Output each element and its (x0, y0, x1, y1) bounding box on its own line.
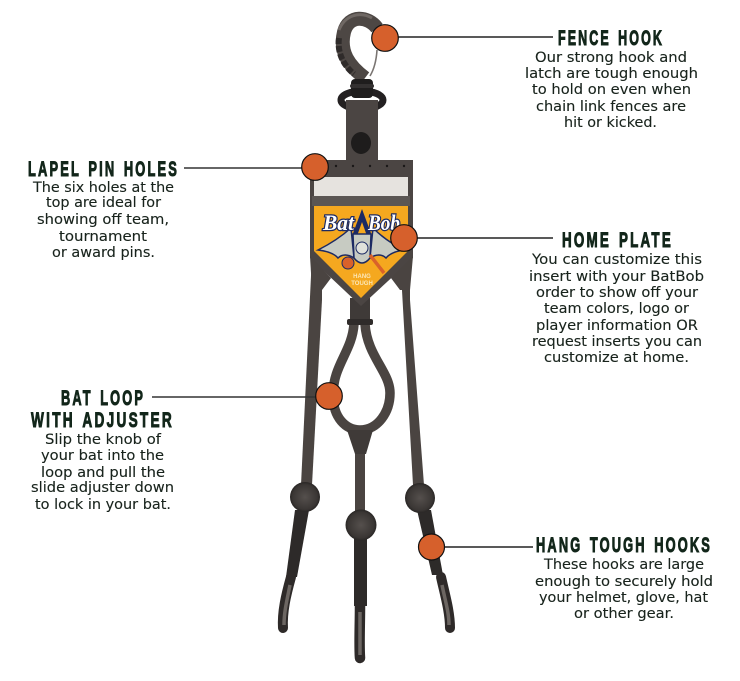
description: top are ideal for (46, 195, 161, 211)
description: slide adjuster down (31, 480, 174, 496)
heading: LAPEL PIN HOLES (28, 158, 179, 181)
description: enough to securely hold (535, 574, 713, 590)
description: customize at home. (544, 350, 689, 366)
three straps (286, 255, 443, 606)
description: tournament (59, 229, 148, 245)
description: latch are tough enough (525, 66, 698, 82)
description: or other gear. (574, 606, 674, 622)
description: player information OR (536, 318, 698, 334)
logo text: Bob (367, 210, 400, 235)
insert caption: TOUGH (351, 281, 373, 287)
description (32, 180, 174, 261)
description: loop and pull the (41, 465, 165, 481)
insert caption: HANG (353, 274, 371, 280)
description (529, 252, 704, 366)
marker (152, 383, 342, 409)
bat loop with adjuster (333, 298, 390, 454)
marker (184, 154, 328, 180)
medallions and hooks (283, 482, 450, 658)
top plate with lapel pin holes (310, 100, 413, 306)
callout: hang tough hooks (418, 534, 713, 622)
description: Slip the knob of (45, 432, 162, 448)
description: chain link fences are (536, 99, 686, 115)
description: to hold on even when (532, 82, 691, 98)
heading: FENCE HOOK (558, 27, 664, 50)
marker (418, 534, 533, 560)
marker (372, 25, 553, 51)
description: request inserts you can (532, 334, 702, 350)
description: team colors, logo or (544, 301, 689, 317)
description: You can customize this (531, 252, 702, 268)
heading: WITH ADJUSTER (31, 409, 174, 432)
callout: bat loop with adjuster (31, 383, 342, 513)
description: The six holes at the (32, 180, 174, 196)
description (525, 50, 698, 131)
callout: fence hook (372, 25, 698, 131)
insert caption (351, 274, 373, 287)
logo text (322, 210, 400, 235)
home plate insert (314, 206, 408, 298)
description (31, 432, 174, 513)
fence hook (339, 15, 383, 109)
description: order to show off your (536, 285, 698, 301)
heading: HOME PLATE (562, 229, 673, 252)
description: to lock in your bat. (35, 497, 171, 513)
description: your bat into the (41, 448, 164, 464)
logo text: Bat (322, 210, 355, 235)
description: These hooks are large (543, 557, 704, 573)
heading (31, 387, 174, 432)
product: BatBob organizer (283, 15, 450, 658)
marker (391, 225, 553, 251)
description: insert with your BatBob (529, 269, 704, 285)
description: hit or kicked. (564, 115, 657, 131)
description: or award pins. (52, 245, 155, 261)
description: your helmet, glove, hat (539, 590, 709, 606)
bat mascot (318, 209, 404, 273)
description: showing off team, (37, 212, 169, 228)
heading: BAT LOOP (61, 387, 145, 410)
callout: lapel pin holes (28, 154, 328, 261)
description (535, 557, 713, 622)
description: Our strong hook and (535, 50, 687, 66)
callout: home plate (391, 225, 704, 366)
